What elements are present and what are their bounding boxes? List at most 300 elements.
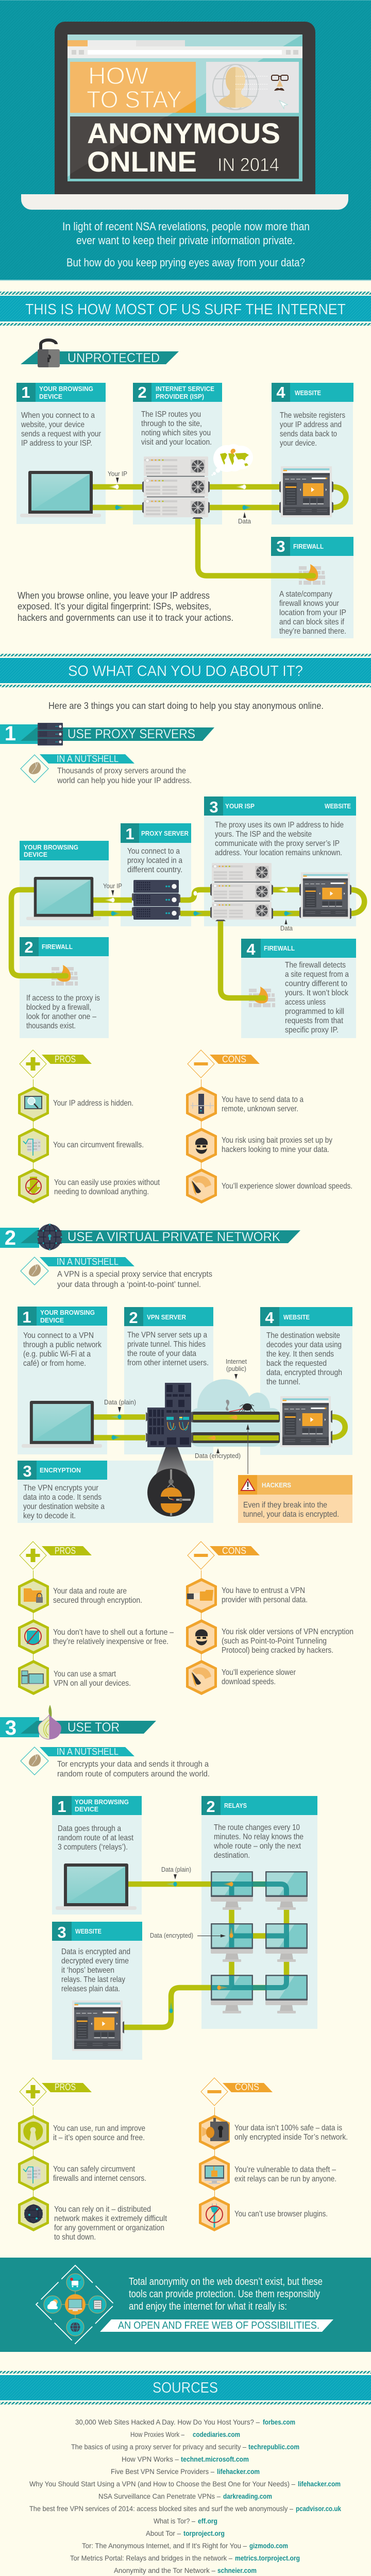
label: data plain: Data (plain) (104, 1398, 136, 1406)
banner: this is how most of us surf: THIS IS HOW MOST OF US SURF THE INTERNET (25, 301, 346, 318)
pro item: encryption (18, 1578, 142, 1613)
title: anonymous online in 2014 (70, 116, 299, 179)
label: internet public (226, 1358, 247, 1379)
panel: website: The website registers (280, 411, 345, 420)
con item: bait proxies: You risk using bait proxies set up by (222, 1136, 332, 1145)
pro item: all devices: VPN on all your devices. (54, 1679, 131, 1688)
intro line: Here are 3 things you can start doing to help you stay anonymous online. (48, 701, 324, 711)
pro item: inexpensive (18, 1619, 174, 1654)
panel: website (tor): relays. The last relay (61, 1975, 125, 1984)
arrow: hackers callout (246, 1424, 249, 1474)
sources list: Why You Should Start Using a VPN (and How to Choose the Best One for Your Needs) – (29, 2480, 295, 2488)
closing text: and enjoy the internet for what it really is: (129, 2301, 287, 2312)
panel: vpn server: VPN SERVER (147, 1313, 187, 1321)
panel: your browsing device (tor): DEVICE (75, 1805, 98, 1813)
con item: no plugins: You can’t use browser plugins. (234, 2210, 328, 2218)
panel: your isp and website: WEBSITE (325, 802, 351, 810)
pro item: safely circumvent: You can safely circumvent (53, 2165, 135, 2174)
panel: website (vpn): back the requested (266, 1359, 327, 1368)
in a nutshell: tor: IN A NUTSHELL (57, 1747, 119, 1757)
con item: not fully safe: only encrypted inside Tor’s network. (234, 2133, 348, 2142)
text block: digital fingerprint (18, 590, 233, 623)
pros: proxy (18, 1050, 160, 1204)
con item: slower speeds: download speeds. (222, 1677, 276, 1686)
panel: your browsing device (proxy): YOUR BROWSING (24, 843, 78, 851)
label: your ip (103, 882, 122, 896)
panel: relays: whole route – only the next (213, 1842, 301, 1851)
pro item: ip hidden (18, 1087, 133, 1122)
panel: firewall 4: yours. It won’t block (285, 989, 349, 997)
con item: entrust provider: You have to entrust a VPN (222, 1586, 305, 1595)
panel: website: your IP address and (280, 420, 342, 429)
panel: your browsing device (vpn): You connect to a VPN (23, 1331, 94, 1340)
panel: website (vpn): data, encrypted through (266, 1368, 342, 1377)
panel: your browsing device: When you connect to a (21, 411, 95, 420)
beam to encryption detail (153, 1444, 191, 1484)
panel: internet service provider: noting which sites you (141, 429, 211, 437)
sources list: pcadvisor.co.uk (296, 2504, 341, 2513)
section 2 heading: use a virtual private network: 2 (5, 1227, 16, 1249)
panel: website (272, 383, 353, 524)
label: data: Data (238, 517, 251, 525)
panel: your browsing device (vpn): DEVICE (40, 1316, 64, 1324)
sources list: Tor: The Anonymous Internet, and If It's Right for You – (82, 2541, 247, 2550)
in a nutshell: vpn: your data through a ‘point-to-point’ tunnel. (57, 1280, 201, 1289)
panel: website (tor): decrypted every time (61, 1957, 129, 1965)
relay monitors (211, 1871, 308, 2013)
panel: your isp and website: The proxy uses its own IP address to hide (215, 821, 344, 829)
con item: slow speeds (186, 1168, 352, 1204)
panel: website (vpn): The destination website (266, 1331, 340, 1340)
con item: unknown server: remote, unknown server. (222, 1105, 298, 1113)
cons: proxy (186, 1050, 352, 1204)
pro item: safely circumvent: firewalls and internet censors. (53, 2174, 146, 2183)
panel: website (tor): WEBSITE (75, 1927, 102, 1935)
panel: relays: 2 (206, 1798, 215, 1816)
pro item: no download: You can easily use proxies without (54, 1178, 160, 1187)
panel: your isp and website: yours. The ISP and the website (215, 830, 312, 839)
icon: encryption lens (147, 1468, 195, 1517)
in a nutshell: vpn: A VPN is a special proxy service that encrypts (57, 1270, 212, 1279)
panel: firewall: 3 (276, 537, 285, 555)
panel: website (vpn): the tunnel. (266, 1378, 300, 1386)
sources list: eff.org (198, 2517, 217, 2525)
sources list: technet.microsoft.com (181, 2455, 249, 2463)
panel: your browsing device (tor): YOUR BROWSING (75, 1798, 129, 1806)
sources list: techrepublic.com (248, 2443, 299, 2451)
sources list: How Proxies Work – (130, 2430, 184, 2438)
panel: proxy server: PROXY SERVER (141, 829, 189, 837)
panel: vpn server: private tunnel. This hides (127, 1340, 206, 1349)
label: internet public: Internet (226, 1358, 247, 1365)
con item: no plugins (199, 2196, 328, 2231)
panel: your isp and website: YOUR ISP (225, 802, 255, 810)
pro item: distributed network: to shut down. (54, 2233, 96, 2242)
closing text (129, 2276, 323, 2312)
con item: bait proxies (186, 1128, 332, 1163)
icon: spider hacker (226, 1400, 255, 1412)
panel: your browsing device: website, your device (21, 420, 85, 429)
sources list: The basics of using a proxy server for privacy and security – (71, 2443, 246, 2451)
panel: your browsing device: IP address to your ISP. (21, 439, 92, 448)
in a nutshell: vpn (21, 1257, 212, 1289)
pros: tor: PROS (55, 2082, 76, 2092)
panel: relays: The route changes every 10 (214, 1823, 300, 1832)
intro text (62, 220, 310, 269)
in a nutshell: tor: Tor encrypts your data and sends it through a (57, 1760, 209, 1769)
panel: your browsing device: sends a request with your (21, 430, 102, 438)
panel: firewall 2: look for another one – (26, 1012, 96, 1021)
panel: website: sends data back to (280, 430, 337, 438)
pro item: all devices: You can use a smart (54, 1670, 116, 1679)
panel: your browsing device (tor): 3 computers (‘relays’). (58, 1843, 128, 1852)
panel: website (tor) (52, 1922, 142, 2060)
panel: firewall 4: FIREWALL (264, 944, 295, 952)
panel: website (tor): 3 (57, 1923, 66, 1941)
panel: firewall 4 (241, 939, 356, 1038)
sources list: 30,000 Web Sites Hacked A Day. How Do You Host Yours? – (75, 2418, 260, 2426)
panel: encryption (18, 1461, 213, 1523)
panel: firewall 4: requests from that (285, 1016, 343, 1025)
panel: proxy server: proxy located in a (127, 856, 182, 865)
panel: firewall 2: thousands exist. (26, 1022, 76, 1030)
label: data encrypted: Data (encrypted) (195, 1452, 241, 1460)
panel: proxy server (121, 823, 191, 926)
panel: website (vpn) (260, 1307, 352, 1455)
panel: internet service provider (133, 383, 222, 524)
section 3 heading: use tor: 3 (5, 1717, 16, 1739)
panel: website (vpn): 4 (265, 1309, 274, 1327)
panel: firewall: FIREWALL (293, 543, 324, 550)
panel: website (tor): releases plain data. (61, 1985, 120, 1993)
panel: hackers warning: tunnel, your data is encrypted. (243, 1510, 339, 1519)
panel: hackers warning: HACKERS (262, 1481, 291, 1489)
panel: your browsing device (proxy): DEVICE (24, 851, 47, 858)
panel: internet service provider: 2 (138, 383, 147, 401)
label: data plain: Data (plain) (161, 1866, 191, 1873)
pro item: inexpensive: You don’t have to shell out a fortune – (53, 1628, 174, 1637)
sources list: About Tor – (146, 2529, 181, 2537)
panel: encryption: The VPN encrypts your (23, 1484, 99, 1493)
label: data plain (161, 1866, 191, 1879)
sources list: Anonymity and the Tor Network – (114, 2566, 215, 2574)
cons: proxy: CONS (222, 1054, 246, 1064)
pro item: no download (18, 1168, 160, 1204)
panel: your browsing device (vpn) (18, 1307, 107, 1454)
pro item: inexpensive: they’re relatively inexpensive or free. (53, 1637, 168, 1646)
panel: firewall 4: country different to (285, 979, 347, 988)
panel: website (vpn): WEBSITE (283, 1313, 310, 1321)
panel: hackers warning: Even if they break into the (243, 1501, 327, 1510)
in a nutshell: tor: random route of computers around the world. (57, 1770, 210, 1778)
icon: web possibilities diamond (36, 2265, 114, 2344)
section 1 heading: use proxy servers: USE PROXY SERVERS (68, 727, 195, 741)
sources list: darkreading.com (223, 2492, 272, 2500)
banner: sources: SOURCES (153, 2380, 218, 2396)
pro item: open source (18, 2115, 145, 2150)
pro item: all devices (18, 1660, 131, 1695)
sources list: schneier.com (217, 2566, 257, 2574)
panel: your browsing device: YOUR BROWSING (39, 385, 93, 393)
diagram: vpn data flow (22, 1358, 345, 1517)
label: data (280, 919, 293, 932)
icon: vpn server rack (147, 1383, 191, 1447)
con item: entrust provider: provider with personal data. (222, 1596, 308, 1604)
panel: vpn server: The VPN server sets up a (127, 1331, 207, 1340)
icon: anonymous face with disguise (206, 62, 299, 113)
icon: server stack (38, 723, 63, 745)
panel: internet service provider: INTERNET SERVICE (156, 385, 214, 393)
label: data encrypted (195, 1448, 241, 1460)
con item: older encryption: You risk older versions of VPN encryption (222, 1628, 353, 1636)
intro text: ever want to keep their private information private. (76, 234, 295, 247)
sources list: NSA Surveillance Can Penetrate VPNs – (98, 2492, 221, 2500)
con item: not fully safe (199, 2115, 348, 2150)
panel: firewall: and can block sites if (279, 618, 344, 626)
ribbon: unprotected (21, 340, 179, 367)
panel: firewall (271, 537, 353, 638)
pro item: open source: You can use, run and improve (53, 2124, 145, 2133)
label: data encrypted: Data (encrypted) (150, 1931, 193, 1939)
con item: unknown server (186, 1087, 303, 1122)
sources list: lifehacker.com (217, 2467, 260, 2476)
panel: firewall: firewall knows your (279, 599, 340, 608)
panel: internet service provider: The ISP routes you (141, 410, 201, 419)
section 3 heading: use tor: USE TOR (68, 1720, 120, 1735)
pro item: encryption: secured through encryption. (53, 1596, 142, 1605)
icon: vpn globe (37, 1224, 62, 1250)
sources list: Five Best VPN Service Providers – (111, 2467, 214, 2476)
title: how to stay: HOW (88, 62, 149, 89)
panel: your browsing device (tor) (52, 1796, 142, 1914)
pro item: distributed network: for any government or organization (54, 2224, 164, 2232)
panel: your isp and website: 3 (209, 798, 218, 816)
pro item: ip hidden: Your IP address is hidden. (53, 1099, 133, 1108)
panel: firewall: A state/company (279, 590, 332, 599)
con item: older encryption: Protocol) being cracked by hackers. (222, 1646, 333, 1655)
intro text: In light of recent NSA revelations, people now more than (62, 220, 310, 233)
in a nutshell: proxy (21, 754, 192, 785)
con item: data theft (199, 2156, 336, 2191)
in a nutshell: proxy: world can help you hide your IP address. (57, 776, 192, 785)
panel: encryption: 3 (23, 1462, 32, 1480)
ribbon: unprotected: UNPROTECTED (68, 351, 160, 365)
pro item: distributed network: network makes it extremely difficult (54, 2214, 167, 2223)
panel: proxy server: different country. (127, 866, 182, 874)
intro text: But how do you keep prying eyes away from your data? (66, 256, 305, 269)
panel: internet service provider: visit and your location. (141, 438, 212, 447)
text block: digital fingerprint: When you browse online, you leave your IP address (18, 590, 210, 601)
header panel (0, 0, 371, 281)
panel: vpn server: the route of your data (127, 1349, 196, 1358)
panel: firewall: they’re banned there. (279, 627, 346, 636)
cons: vpn (186, 1541, 353, 1695)
diagram: unprotected data flow (20, 444, 346, 576)
panel: website: WEBSITE (295, 389, 321, 397)
panel: firewall 2: 2 (24, 938, 33, 956)
con item: slower speeds: You’ll experience slower (222, 1668, 296, 1677)
panel: firewall 2: If access to the proxy is (26, 994, 100, 1003)
pro item: open source: it – it’s open source and free. (53, 2133, 145, 2142)
panel: your browsing device (proxy) (20, 841, 109, 926)
in a nutshell: vpn: IN A NUTSHELL (57, 1257, 119, 1267)
label: data plain (104, 1398, 136, 1413)
in a nutshell: proxy: Thousands of proxy servers around the (57, 767, 186, 775)
banner: so what can you do about it (0, 654, 371, 687)
pro item: circumvent firewalls: You can circumvent firewalls. (53, 1141, 144, 1149)
title: anonymous online in 2014: ANONYMOUS (87, 117, 280, 149)
banner: so what can you do about it: SO WHAT CAN YOU DO ABOUT IT? (68, 663, 303, 680)
encrypted tunnels (192, 1412, 280, 1443)
con item: bait proxies: hackers looking to mine your data. (222, 1145, 329, 1154)
label: data encrypted (150, 1931, 226, 1939)
panel: vpn server (124, 1307, 213, 1454)
panel: your browsing device (vpn): 1 (22, 1308, 31, 1326)
cons: vpn: CONS (222, 1546, 246, 1556)
panel: encryption: ENCRYPTION (40, 1466, 81, 1474)
panel: internet service provider: PROVIDER (ISP) (156, 393, 204, 400)
panel: your browsing device (tor): random route of at least (58, 1834, 133, 1842)
con item: older encryption: (such as Point-to-Point Tunneling (222, 1637, 327, 1646)
sources list: How VPN Works – (122, 2455, 179, 2463)
panel: firewall 2 (20, 937, 109, 1038)
panel: firewall 2: FIREWALL (42, 943, 73, 951)
panel: firewall 4: The firewall detects (285, 961, 346, 970)
panel: proxy server: You connect to a (127, 847, 180, 856)
con item: data theft: You’re vulnerable to data theft – (234, 2165, 336, 2174)
label: data (238, 512, 251, 525)
pro item: circumvent firewalls (18, 1128, 144, 1163)
pro item: safely circumvent (18, 2156, 146, 2191)
icon: onion (38, 1705, 61, 1739)
in a nutshell: proxy: IN A NUTSHELL (57, 754, 119, 764)
sources list: Tor Metrics Portal: Relays and bridges in the network – (70, 2554, 232, 2562)
panel: website (tor): it ‘hops’ between (61, 1966, 114, 1975)
panel: your browsing device (tor): 1 (57, 1798, 66, 1816)
icon: warning triangle (241, 1479, 255, 1490)
panel: firewall 4: specific proxy IP. (285, 1026, 339, 1035)
section 2 heading: use a virtual private network (0, 1224, 300, 1250)
pros: vpn: PROS (55, 1546, 76, 1556)
panel: firewall: location from your IP (279, 608, 346, 617)
panel: firewall 2: blocked by a firewall, (26, 1003, 91, 1012)
in a nutshell: tor (21, 1747, 210, 1778)
title: how to stay (70, 62, 196, 113)
panel: your browsing device (vpn): café) or from home. (23, 1359, 86, 1368)
con item: unknown server: You have to send data to a (222, 1095, 303, 1104)
con item: slower speeds (186, 1660, 296, 1695)
text block: digital fingerprint: exposed. It’s your digital fingerprint: ISPs, websites, (18, 601, 211, 612)
closing text: tools can provide protection. Use them responsibly (129, 2289, 320, 2300)
con item: not fully safe: Your data isn’t 100% safe – data is (234, 2124, 342, 2132)
con item: older encryption (186, 1619, 353, 1655)
label: your ip: Your IP (103, 882, 122, 890)
panel: relays: destination. (214, 1851, 250, 1860)
label: your ip (108, 470, 127, 483)
closing panel (0, 2258, 371, 2352)
icon: location thought cloud (211, 444, 253, 476)
label: your ip: Your IP (108, 470, 127, 478)
laptop illustration (21, 22, 348, 210)
label: internet public: (public) (226, 1365, 246, 1372)
panel: hackers warning (238, 1475, 352, 1523)
title: anonymous online in 2014: IN 2014 (217, 154, 279, 175)
cons: tor (199, 2078, 348, 2231)
panel: website (tor): Data is encrypted and (61, 1947, 130, 1956)
panel: relays (201, 1796, 317, 2029)
sources list: codediaries.com (193, 2430, 240, 2438)
panel: your isp and website: address. Your location remains unknown. (215, 849, 342, 857)
sources list: metrics.torproject.org (235, 2554, 300, 2562)
panel: vpn server: 2 (129, 1309, 138, 1327)
diagram: proxy data flow (11, 863, 364, 998)
closing text: Total anonymity on the web doesn’t exist, but these (129, 2276, 323, 2287)
con item: data theft: exit relays can be run by anyone. (234, 2175, 336, 2183)
section 1 heading: use proxy servers: 1 (5, 722, 16, 745)
panel: vpn server: from other internet users. (127, 1359, 209, 1367)
ribbon: open and free web: AN OPEN AND FREE WEB OF POSSIBILITIES. (118, 2320, 319, 2331)
panel: proxy server: 1 (125, 825, 134, 843)
panel: website (vpn): the key. It then sends (266, 1350, 334, 1359)
title: anonymous online in 2014: ONLINE (87, 145, 197, 178)
panel: your browsing device (vpn): (e.g. public Wi-Fi at a (23, 1350, 91, 1359)
internet cloud (191, 1379, 280, 1447)
cons: tor: CONS (235, 2082, 259, 2092)
panel: firewall 4: programmed to kill (285, 1007, 344, 1016)
text block: digital fingerprint: hackers and governments can use it to track your actions. (18, 613, 233, 623)
label: data: Data (280, 924, 293, 932)
panel: your browsing device (vpn): through a public network (23, 1341, 102, 1349)
sources list: gizmodo.com (249, 2541, 288, 2550)
pro item: distributed network (18, 2196, 167, 2242)
route through screens (212, 1884, 286, 1988)
panel: your browsing device (tor): Data goes through a (58, 1824, 121, 1833)
panel: relays: RELAYS (224, 1802, 247, 1809)
con item: entrust provider (186, 1578, 308, 1613)
panel: your browsing device (16, 383, 106, 524)
sources list: What is Tor? – (154, 2517, 195, 2525)
panel: internet service provider: through to the site, (141, 419, 202, 428)
pro item: encryption: Your data and route are (53, 1587, 127, 1596)
panel: encryption: key to decode it. (23, 1512, 76, 1520)
pros: vpn (18, 1541, 174, 1695)
panel: your isp and website: communicate with the proxy server’s IP (215, 839, 340, 848)
sources list: lifehacker.com (298, 2480, 341, 2488)
panel: encryption: your destination website a (23, 1502, 105, 1511)
panel: firewall 4: a site request from a (285, 970, 349, 979)
title: how to stay: TO STAY (87, 86, 182, 113)
pro item: distributed network: You can rely on it – distributed (54, 2205, 151, 2214)
banner: this is how most of us surf (0, 292, 371, 326)
sources list: forbes.com (263, 2418, 295, 2426)
panel: firewall 4: access unless (285, 998, 326, 1007)
section 2 heading: use a virtual private network: USE A VIRTUAL PRIVATE NETWORK (68, 1230, 280, 1244)
panel: relays: minutes. No relay knows the (214, 1833, 303, 1841)
section 3 heading: use tor (0, 1705, 156, 1739)
panel: website (vpn): decodes your data using (266, 1341, 342, 1349)
pros: proxy: PROS (55, 1054, 76, 1064)
panel: your browsing device: 1 (21, 383, 30, 401)
panel: encryption: data into a code. It sends (23, 1493, 102, 1502)
diagram: tor relay network (56, 1863, 308, 2051)
panel: website: 4 (276, 383, 285, 401)
panel: firewall 4: 4 (246, 940, 256, 958)
pros: tor (18, 2078, 167, 2242)
panel: your browsing device: DEVICE (39, 393, 62, 400)
section 1 heading: use proxy servers (0, 722, 214, 745)
sources list: torproject.org (183, 2529, 225, 2537)
sources list: The best free VPN services of 2014: access blocked sites and surf the web anonymously – (29, 2504, 293, 2513)
